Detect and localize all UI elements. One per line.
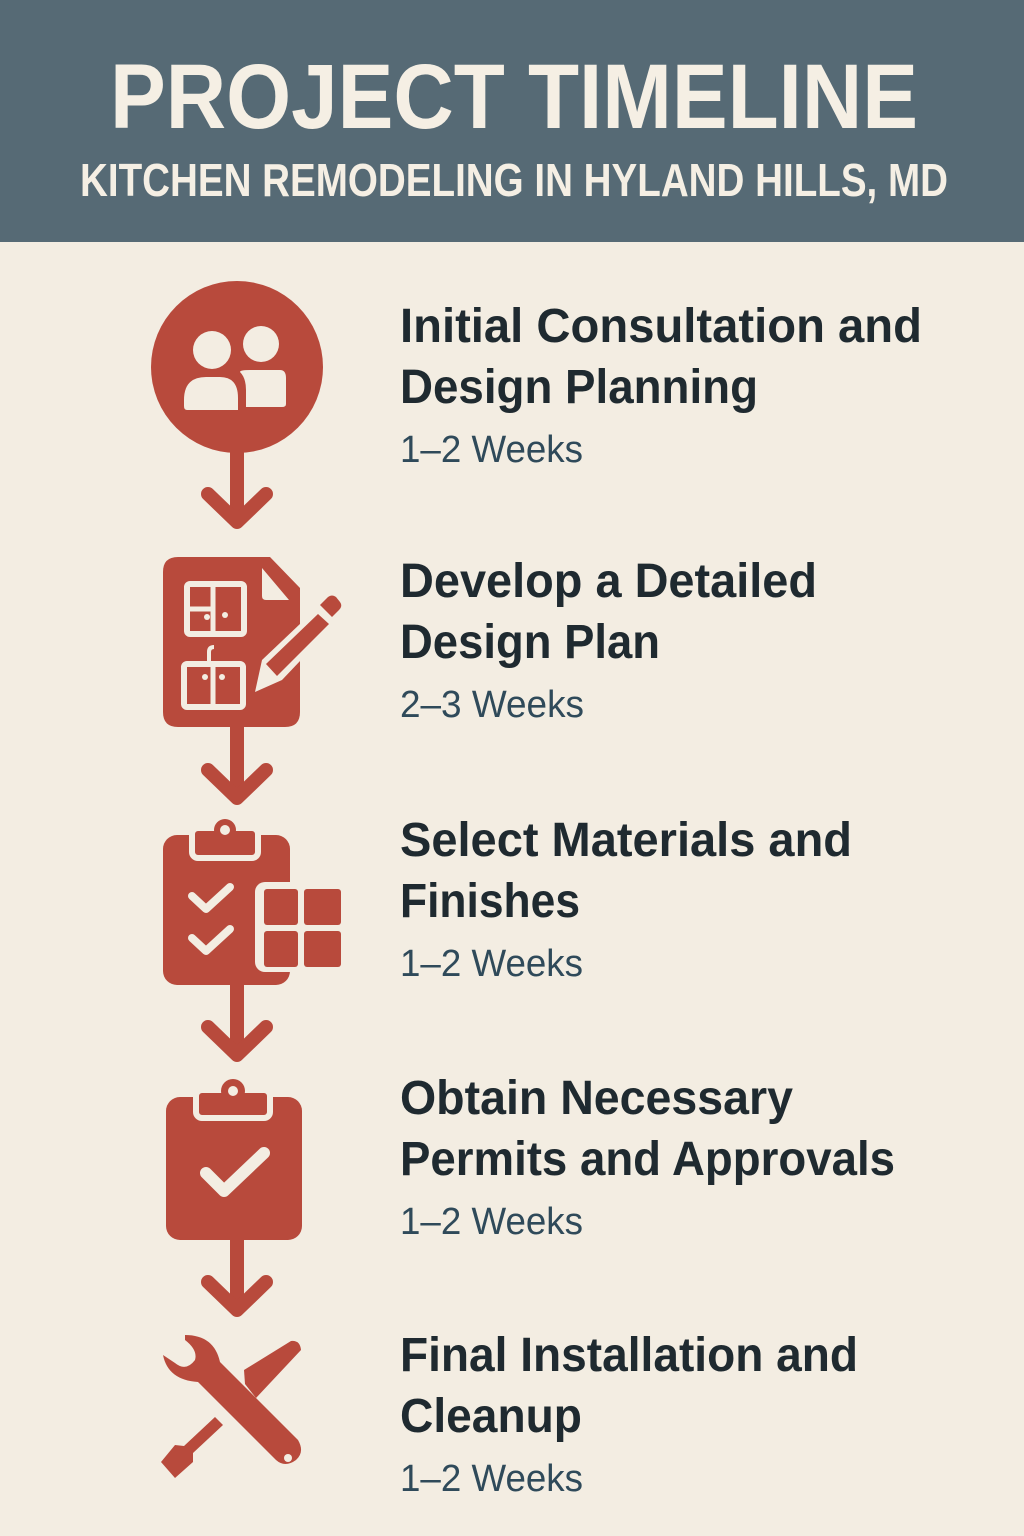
step 1 text: 1–2 Weeks [400, 429, 583, 471]
step 2 text: Develop a Detailed [400, 555, 817, 608]
step 3 text [400, 814, 852, 985]
step 5 text: Final Installation and [400, 1329, 858, 1382]
step 5 text: Cleanup [400, 1390, 582, 1443]
arrow 3 [208, 983, 266, 1055]
icon: consultation people [151, 281, 323, 453]
step 3 text: Select Materials and [400, 814, 852, 867]
icon: wrench and screwdriver [161, 1335, 301, 1478]
step 2 text: Design Plan [400, 616, 660, 669]
title: PROJECT TIMELINE [110, 46, 918, 148]
header banner [0, 0, 1024, 242]
icon: design plan document [163, 557, 341, 727]
arrow 4 [208, 1238, 266, 1310]
step 4 text: Permits and Approvals [400, 1133, 895, 1186]
step 1 text [400, 300, 922, 471]
step 2 text [400, 555, 817, 726]
step 5 text: 1–2 Weeks [400, 1458, 583, 1500]
step 2 text: 2–3 Weeks [400, 684, 584, 726]
arrow 2 [208, 725, 266, 798]
step 4 text [400, 1072, 895, 1243]
step 4 text: Obtain Necessary [400, 1072, 793, 1125]
step 4 text: 1–2 Weeks [400, 1201, 583, 1243]
step 3 text: 1–2 Weeks [400, 943, 583, 985]
step 1 text: Initial Consultation and [400, 300, 922, 353]
icon: materials clipboard with tiles [163, 819, 345, 985]
icon: permits clipboard check [166, 1079, 302, 1240]
arrow 1 [208, 450, 266, 522]
step 1 text: Design Planning [400, 361, 758, 414]
step 3 text: Finishes [400, 875, 580, 928]
step 5 text [400, 1329, 858, 1500]
